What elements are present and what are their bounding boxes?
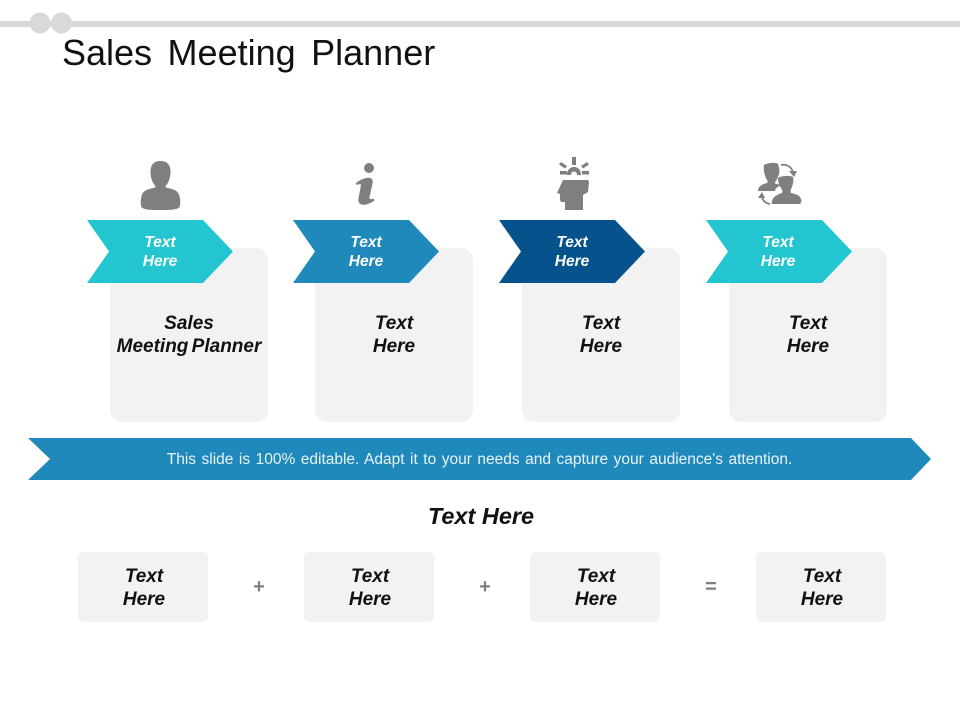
arrow: label 1 [87, 220, 233, 283]
equation text 2 [349, 566, 391, 610]
icon: head with idea [557, 157, 589, 210]
equation text 3 [575, 566, 617, 610]
arrow text 3: Here [555, 253, 589, 270]
plus sign 1: + [253, 576, 265, 598]
icon: people exchange [758, 162, 802, 205]
arrow: label 3 [499, 220, 645, 283]
banner arrow [28, 438, 931, 480]
arrow text 4: Text [762, 234, 794, 251]
equals sign: = [705, 576, 717, 598]
subheading: Text Here [428, 503, 534, 529]
arrow text 4 [761, 234, 795, 270]
arrow text 2 [349, 234, 383, 270]
arrow text 2: Text [350, 234, 382, 251]
panel: card 1 [110, 248, 268, 422]
equation text 1: Text [125, 566, 163, 587]
arrow text 1 [143, 234, 177, 270]
card text 4: Here [787, 336, 829, 357]
card text 3: Here [580, 336, 622, 357]
panel: card 2 [315, 248, 473, 422]
equation text 4: Text [803, 566, 841, 587]
equation text 1 [123, 566, 165, 610]
banner text: This slide is 100% editable. Adapt it to your needs and capture your audience's attention. [167, 451, 792, 468]
arrow text 3: Text [556, 234, 588, 251]
equation text 2: Here [349, 589, 391, 610]
equation box 4 [756, 552, 886, 622]
equation box 3 [530, 552, 660, 622]
arrow: label 4 [706, 220, 852, 283]
plus sign 2: + [479, 576, 491, 598]
arrow text 3 [555, 234, 589, 270]
card text 1 [117, 313, 262, 357]
arrow text 1: Here [143, 253, 177, 270]
title: Sales Meeting Planner [62, 32, 435, 73]
card text 4 [787, 313, 829, 357]
icon: information [356, 163, 374, 205]
card text 3 [580, 313, 622, 357]
equation text 4 [801, 566, 843, 610]
equation text 3: Here [575, 589, 617, 610]
card text 3: Text [582, 313, 620, 334]
card text 2 [373, 313, 415, 357]
card text 4: Text [789, 313, 827, 334]
card text 2: Text [375, 313, 413, 334]
equation text 1: Here [123, 589, 165, 610]
icon: person [140, 161, 180, 210]
arrow text 2: Here [349, 253, 383, 270]
panel: card 3 [522, 248, 680, 422]
equation text 2: Text [351, 566, 389, 587]
equation text 3: Text [577, 566, 615, 587]
card text 1: Sales [164, 313, 214, 334]
card text 1: Meeting Planner [117, 336, 261, 357]
panel: card 4 [729, 248, 887, 422]
arrow text 1: Text [144, 234, 176, 251]
header decoration bar [0, 12, 960, 34]
card text 2: Here [373, 336, 415, 357]
equation text 4: Here [801, 589, 843, 610]
arrow: label 2 [293, 220, 439, 283]
equation box 1 [78, 552, 208, 622]
arrow text 4: Here [761, 253, 795, 270]
equation box 2 [304, 552, 434, 622]
